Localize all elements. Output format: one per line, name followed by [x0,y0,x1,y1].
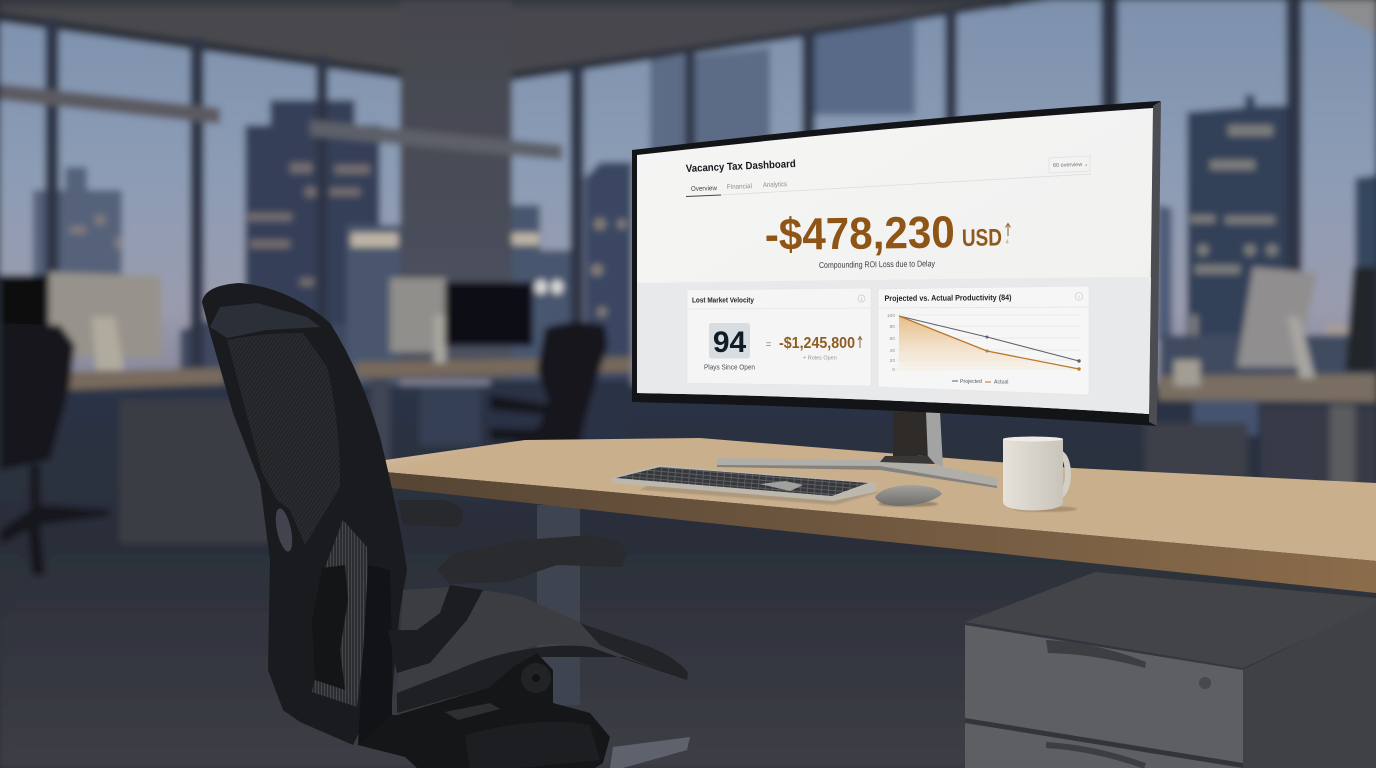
info icon [1075,293,1083,300]
monitor [632,101,1161,488]
ceiling and window frames [0,0,1302,380]
floor base post [610,737,690,768]
chart legend: Projected [960,379,982,385]
card: projected vs actual chart [878,286,1089,395]
coffee mug [1003,436,1077,512]
y axis labels: 0 [892,367,895,373]
headrest [210,303,320,338]
tab: overview: Overview [691,185,717,193]
dashboard title: Vacancy Tax Dashboard [686,158,796,175]
right armrest [437,535,627,584]
main loss figure: 4 [1006,240,1010,246]
arm support [388,585,483,673]
monitor bezel [632,101,1160,426]
days caption: Plays Since Open [704,362,755,372]
tab underline [686,195,721,196]
projected line [899,316,1079,361]
chart legend: Actual [994,380,1008,386]
dropdown [1049,156,1090,173]
seat front lip [580,623,688,680]
y axis labels: 60 [890,336,895,342]
card title: Lost Market Velocity [692,296,755,304]
small arrow [858,336,862,348]
office chair [202,283,690,768]
card: lost market velocity [687,288,871,386]
floor [0,385,1376,768]
pendant light bars [0,0,1376,160]
main loss figure [764,206,1010,270]
monitor screen [637,108,1153,414]
foreground file cabinet [965,572,1376,768]
lumbar support [312,565,348,690]
y axis labels: 20 [890,358,895,364]
up arrow [1006,224,1010,236]
y axis labels: 80 [890,324,895,330]
desk [385,438,1376,593]
background desks [61,357,1376,543]
currency: USD [962,224,1002,252]
tab: financial: Financial [727,183,753,191]
chair back frame [202,283,407,745]
mouse [875,485,942,507]
background chairs [0,322,608,575]
line chart [887,313,1081,373]
equals sign: = [766,339,771,349]
chart legend [952,379,1008,386]
desk leg [537,505,580,705]
dashboard header [686,156,1091,196]
days number: 94 [713,326,746,359]
background monitors [0,267,1376,386]
subtitle: Compounding ROI Loss due to Delay [819,258,936,270]
y axis labels: 100 [887,313,895,319]
main loss figure: -$478,230 [764,206,955,260]
frame opening [273,507,295,553]
chair rear post [358,565,392,745]
city skyline through windows [0,0,1376,385]
chart title: Projected vs. Actual Productivity (84) [884,293,1012,303]
y axis labels: 40 [890,348,895,354]
days tile [709,323,750,358]
lower dashboard band [637,277,1151,414]
keyboard [611,465,880,505]
seat mesh [397,587,688,693]
lower mesh [312,520,368,707]
left armrest [398,500,463,527]
tab: analytics: Analytics [763,181,788,189]
upper mesh [227,333,340,545]
actual line [899,316,1079,369]
info icon [858,295,865,302]
velocity loss value: -$1,245,800 [779,335,855,352]
seat underside band [397,646,687,713]
monitor stand [717,412,997,488]
loss caption: + Roles Open [803,356,837,362]
dropdown: 60 overview ⌄ [1053,162,1089,169]
seat mechanism [358,653,610,768]
shaded gap area [899,316,1079,371]
y axis labels [887,313,895,373]
